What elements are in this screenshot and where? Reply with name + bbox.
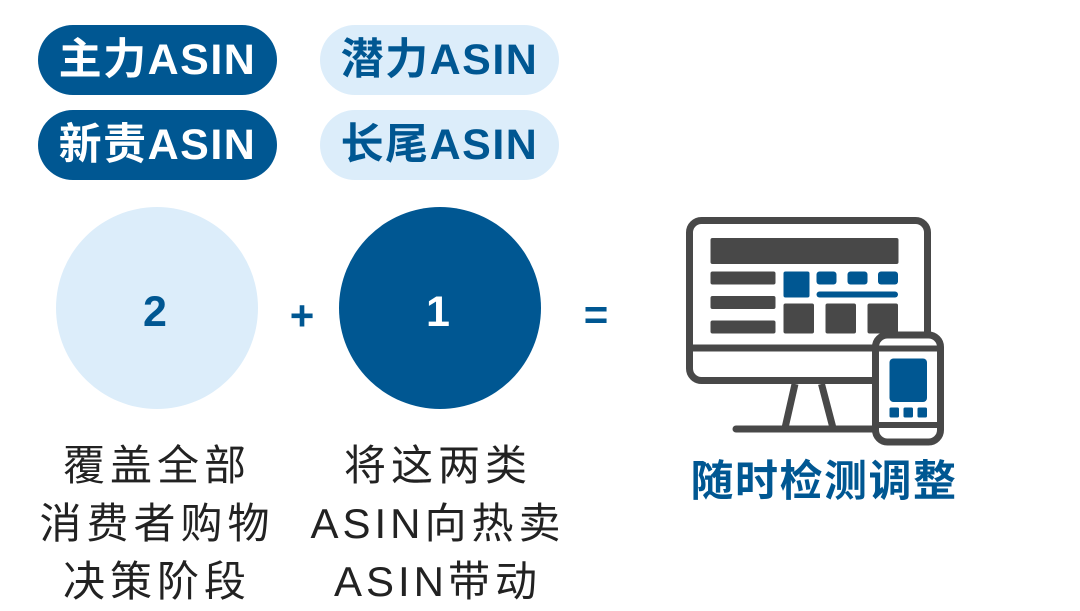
tag: potential ASIN xyxy=(320,25,559,95)
tag: new product ASIN xyxy=(38,110,277,180)
tag: long tail ASIN: 长尾ASIN xyxy=(341,121,538,169)
tag: primary ASIN: 主力ASIN xyxy=(59,36,256,84)
circle: number 2: 2 xyxy=(143,288,167,336)
heading: monitor and adjust: 随时检测调整 xyxy=(690,458,958,506)
caption: covers all decision stages xyxy=(39,442,274,605)
caption: these two drive the best sellers: 将这两类 xyxy=(344,442,532,489)
tag: new product ASIN: 新责ASIN xyxy=(59,121,256,169)
circle: number 1 xyxy=(339,207,541,409)
circle: number 2 xyxy=(56,207,258,409)
tag: potential ASIN: 潜力ASIN xyxy=(341,36,538,84)
caption: covers all decision stages: 决策阶段 xyxy=(63,558,251,605)
tag: primary ASIN xyxy=(38,25,277,95)
caption: covers all decision stages: 覆盖全部 xyxy=(63,442,251,489)
caption: these two drive the best sellers xyxy=(310,442,566,605)
equals sign: = xyxy=(584,291,608,338)
circle: number 1: 1 xyxy=(426,288,450,336)
caption: covers all decision stages: 消费者购物 xyxy=(39,500,274,547)
tag: long tail ASIN xyxy=(320,110,559,180)
icon: desktop monitor and phone xyxy=(686,217,944,446)
caption: these two drive the best sellers: ASIN带动 xyxy=(334,558,542,605)
plus sign: + xyxy=(290,292,314,339)
caption: these two drive the best sellers: ASIN向热卖 xyxy=(310,500,566,547)
